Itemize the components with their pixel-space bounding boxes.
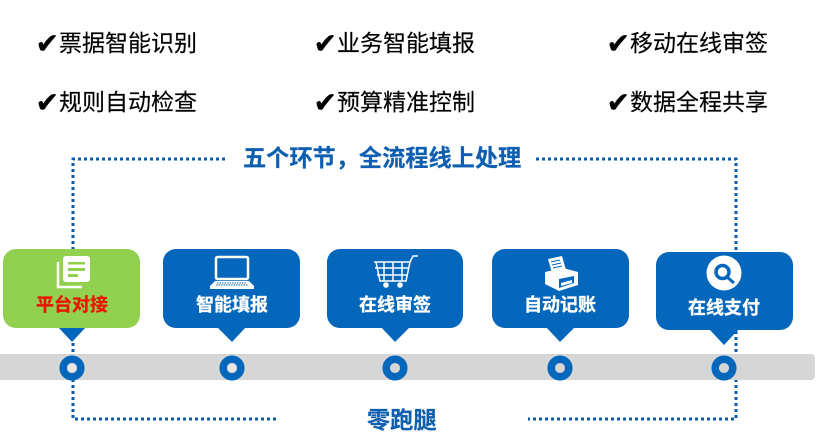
icon: documents bbox=[58, 256, 90, 287]
node 1 bbox=[63, 359, 81, 377]
feature: 预算精准控制: 预算精准控制 bbox=[337, 89, 475, 115]
feature: 规则自动检查 bbox=[36, 86, 197, 119]
feature: 规则自动检查: 规则自动检查 bbox=[59, 89, 197, 115]
feature: 移动在线审签 bbox=[606, 27, 768, 60]
step: 自动记账 bbox=[492, 249, 629, 342]
step: 平台对接 bbox=[3, 249, 140, 342]
bottom label: 零跑腿 bbox=[367, 407, 437, 433]
step: 在线支付: 在线支付 bbox=[688, 298, 760, 318]
feature: 票据智能识别: 票据智能识别 bbox=[59, 30, 197, 56]
feature: 预算精准控制 bbox=[314, 86, 475, 119]
step: 自动记账: 自动记账 bbox=[524, 295, 596, 315]
feature: 数据全程共享 bbox=[606, 86, 768, 119]
feature: 业务智能填报: ✔ bbox=[314, 27, 337, 60]
feature: 票据智能识别: ✔ bbox=[36, 27, 59, 60]
icon: printer bbox=[545, 256, 578, 291]
icon: magnifier bbox=[706, 256, 742, 290]
feature: 规则自动检查: ✔ bbox=[36, 86, 59, 119]
feature: 业务智能填报: 业务智能填报 bbox=[337, 30, 475, 56]
icon: shopping cart bbox=[374, 256, 418, 288]
icon: laptop bbox=[210, 257, 254, 289]
feature: 数据全程共享: 数据全程共享 bbox=[630, 89, 768, 115]
feature: 票据智能识别 bbox=[36, 27, 197, 60]
step: 智能填报: 智能填报 bbox=[196, 294, 268, 315]
feature list bbox=[36, 27, 768, 119]
process heading: 五个环节，全流程线上处理 bbox=[243, 145, 521, 171]
feature: 移动在线审签: ✔ bbox=[606, 27, 630, 60]
node 5 bbox=[715, 359, 733, 377]
node 2 bbox=[223, 359, 241, 377]
feature: 数据全程共享: ✔ bbox=[606, 86, 630, 119]
step: 在线支付 bbox=[656, 252, 793, 345]
node 3 bbox=[386, 359, 404, 377]
step: 平台对接: 平台对接 bbox=[36, 294, 108, 315]
dotted process loop bbox=[73, 159, 736, 419]
step: 在线审签: 在线审签 bbox=[359, 294, 431, 315]
step: 在线审签 bbox=[327, 249, 463, 342]
timeline nodes bbox=[63, 359, 733, 377]
feature: 业务智能填报 bbox=[314, 27, 475, 60]
timeline bar bbox=[0, 354, 815, 380]
feature: 移动在线审签: 移动在线审签 bbox=[630, 30, 768, 56]
step: 智能填报 bbox=[163, 249, 300, 342]
node 4 bbox=[551, 359, 569, 377]
feature: 预算精准控制: ✔ bbox=[314, 86, 337, 119]
